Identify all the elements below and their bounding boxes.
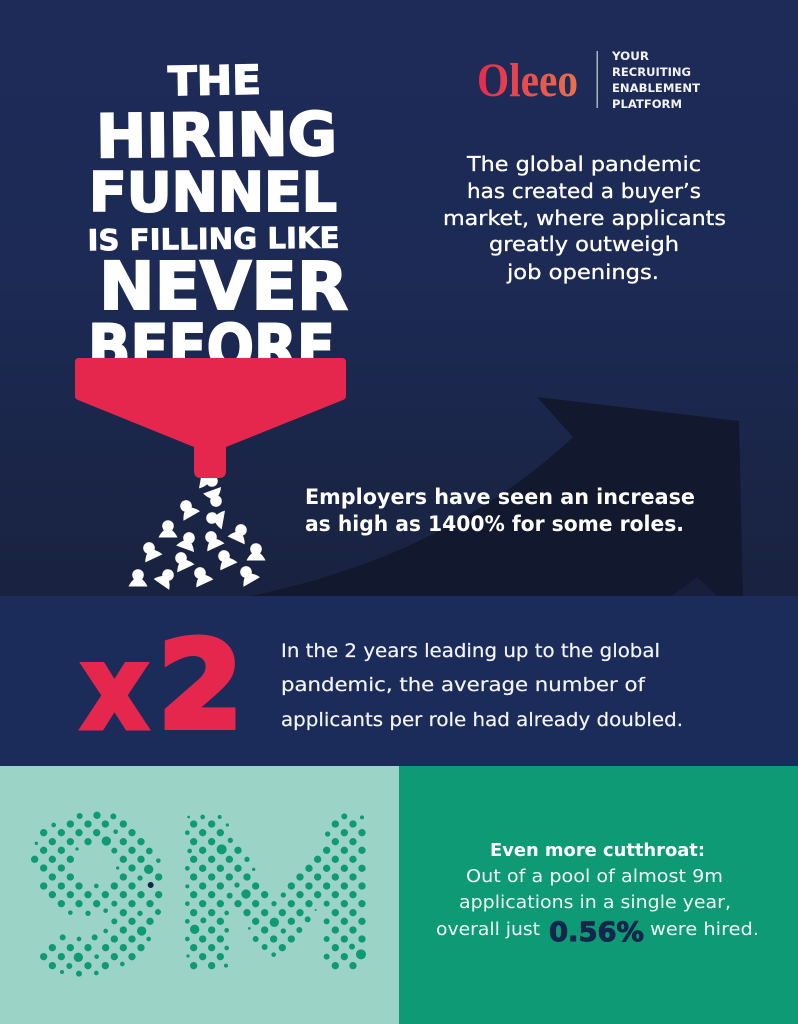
title: NEVER — [99, 248, 348, 325]
title — [90, 64, 348, 358]
text block: pandemic intro: market, where applicants — [443, 206, 726, 230]
icon: people falling from the funnel — [128, 470, 266, 590]
logo tagline: ENABLEMENT — [612, 81, 700, 95]
text block: employers increase: as high as 1400% for some roles. — [305, 512, 684, 536]
text block: pandemic intro — [443, 152, 726, 284]
text block: applications pool: overall just — [436, 920, 540, 940]
panel: x2 band — [0, 596, 798, 766]
text block: pandemic intro: greatly outweigh — [489, 232, 679, 256]
title: THE — [168, 58, 261, 105]
title: HIRING — [96, 100, 337, 172]
logo tagline — [597, 49, 700, 111]
panel: hero background — [0, 0, 798, 596]
title: IS FILLING LIKE — [87, 221, 340, 257]
text block: applications pool: Out of a pool of almost 9m — [466, 867, 723, 887]
background arrow — [250, 397, 743, 596]
text block: applicants doubled: applicants per role had already doubled. — [281, 709, 683, 731]
text block: pandemic intro: has created a buyer’s — [467, 179, 701, 203]
text block: pandemic intro: The global pandemic — [466, 152, 701, 176]
stat: x2: x — [81, 621, 148, 756]
text block: applications pool: applications in a single year, — [459, 893, 731, 913]
text block: employers increase: Employers have seen an increase — [305, 485, 695, 509]
text block: applicants doubled: pandemic, the average number of — [281, 674, 646, 696]
panel: 9M light green — [0, 766, 399, 1024]
text block: applicants doubled — [281, 640, 683, 731]
text block: applications pool: were hired. — [650, 920, 759, 940]
logo tagline: YOUR — [611, 49, 649, 63]
text block: pandemic intro: job openings. — [506, 260, 659, 284]
icon: red funnel — [75, 358, 346, 478]
stat: x2: 2 — [158, 617, 243, 756]
text block: cutthroat heading: Even more cutthroat: — [490, 840, 705, 861]
panel: cutthroat green — [399, 766, 798, 1024]
logo tagline: RECRUITING — [612, 65, 691, 79]
chart: 9M halftone dots — [31, 812, 366, 976]
text block: applications pool — [436, 867, 759, 940]
text block: employers increase — [305, 485, 695, 536]
logo: Oleeo — [477, 49, 700, 111]
title: FUNNEL — [89, 161, 337, 224]
logo wordmark: Oleeo — [477, 54, 578, 107]
text block: applicants doubled: In the 2 years leading up to the global — [281, 640, 660, 662]
title: BEFORE — [88, 311, 335, 384]
stat: x2 — [81, 617, 243, 756]
logo tagline: PLATFORM — [612, 97, 682, 111]
stat: 0.56%: 0.56% — [549, 917, 644, 948]
